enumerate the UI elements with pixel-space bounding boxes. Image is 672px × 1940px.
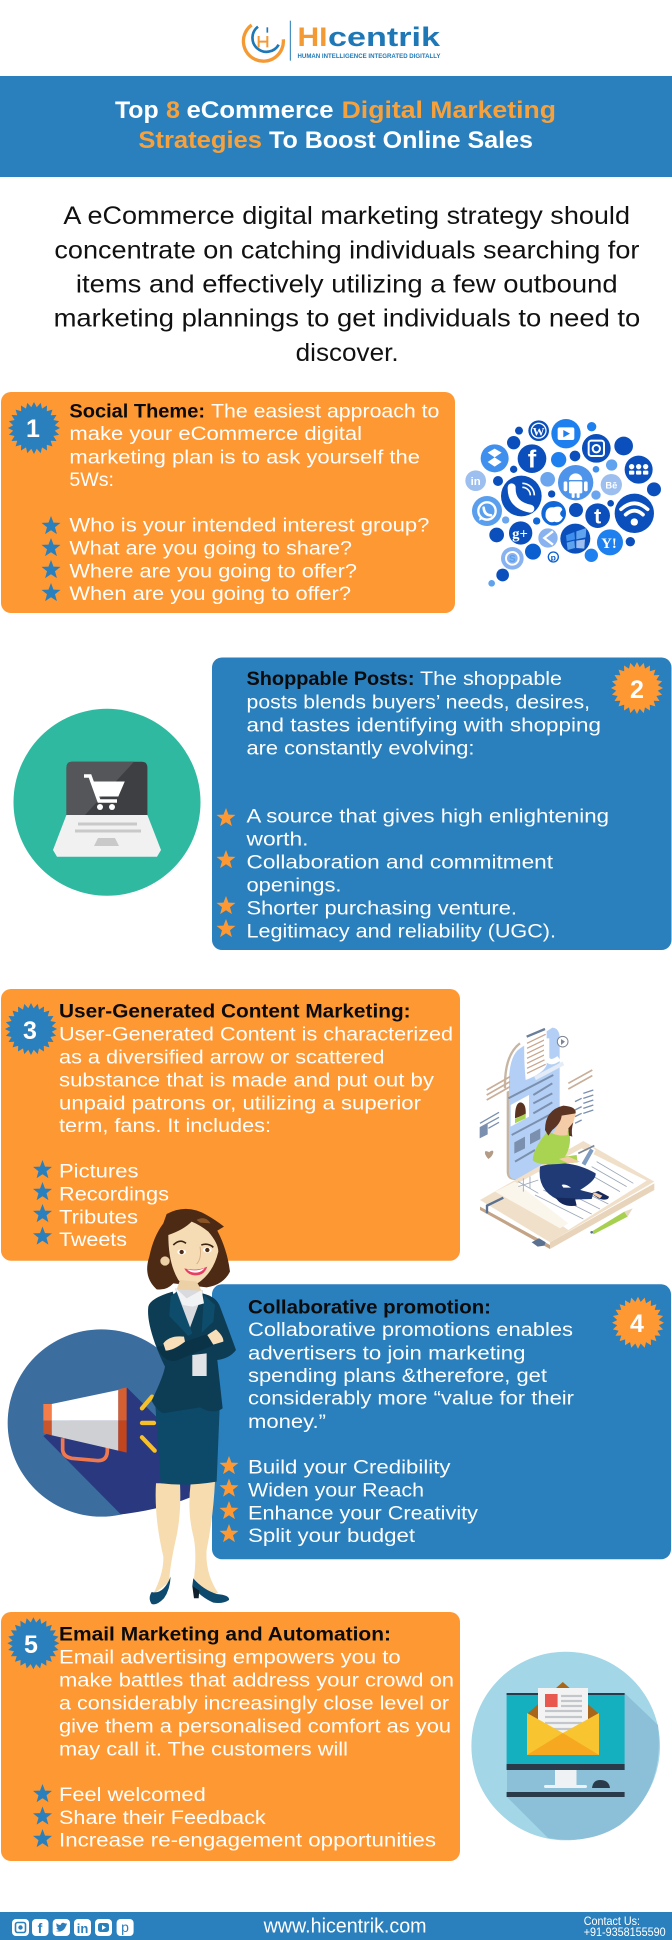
heading and intro text 5 [59,1625,454,1760]
badge 4: 4 [630,1310,644,1338]
icon: email envelope on monitor [471,1652,660,1840]
icon: social media speech cloud: g+ [512,527,528,543]
intro paragraph: marketing plannings to get individuals to need to [54,305,640,333]
heading and intro text 2: posts blends buyers’ needs, desires, [246,692,590,713]
panel 1: social theme [1,392,455,613]
bullet list 4: Enhance your Creativity [248,1503,479,1524]
bullet list 5: Feel welcomed [59,1785,206,1806]
social icons: in [77,1921,88,1936]
heading and intro text 4 [248,1297,575,1433]
heading and intro text 2 [246,669,601,759]
social icons: p [121,1919,129,1935]
panel 5: email marketing [1,1612,460,1861]
heading and intro text 2: are constantly evolving: [246,738,474,759]
heading and intro text 5: Email advertising empowers you to [59,1648,401,1669]
badge 4 [612,1297,664,1349]
bullet list 2: Legitimacy and reliability (UGC). [246,921,556,942]
badge 1: 1 [26,415,40,443]
title banner: To Boost Online Sales [269,127,533,154]
intro paragraph: concentrate on catching individuals searching for [54,237,639,265]
title banner: Digital Marketing [342,97,556,124]
logo: HIcentrik [243,21,441,61]
icon: social media speech cloud: Y! [601,536,617,552]
heading and intro text 1: 5Ws: [69,470,114,491]
contact details [584,1914,666,1939]
bullet list 2 [216,807,609,942]
heading and intro text 4: Collaborative promotion: [248,1297,491,1318]
title banner [0,76,672,177]
badge 1 [8,402,60,454]
bullet list 4: Split your budget [248,1526,416,1547]
illustration: person reading on a book with giant phone [480,1028,654,1249]
icon: social media speech cloud: in [471,476,481,488]
website url: www.hicentrik.com [263,1916,427,1938]
intro paragraph: items and effectively utilizing a few outbound [76,271,618,299]
heading and intro text 3 [59,1002,453,1137]
icon: social media speech cloud [465,419,661,587]
intro paragraph: discover. [296,339,399,367]
icon: laptop with shopping cart on green circle [14,709,200,896]
bullet list 1: Who is your intended interest group? [69,516,429,537]
bullet list 2: Shorter purchasing venture. [246,898,517,919]
heading and intro text 4: advertisers to join marketing [248,1343,526,1364]
heading and intro text 4: money.” [248,1412,326,1433]
badge 5 [7,1617,59,1669]
social icons: f [38,1920,43,1936]
logo: HIcentrik: HI [298,22,328,52]
icon: social media speech cloud: t [594,504,601,528]
bullet list 5: Increase re-engagement opportunities [59,1831,436,1852]
footer bar [0,1912,672,1940]
title banner: eCommerce [186,97,334,124]
heading and intro text 3: User-Generated Content is characterized [59,1025,453,1046]
bullet list 4: Build your Credibility [248,1457,451,1478]
bullet list 2: Collaboration and commitment [246,852,554,873]
bullet list 2: openings. [246,876,342,897]
icon: social media speech cloud: Bē [605,480,617,490]
social icons [12,1919,134,1936]
icon: social media speech cloud: p [551,553,556,563]
heading and intro text 4: considerably more “value for their [248,1389,575,1410]
heading and intro text 5: Email Marketing and Automation: [59,1625,391,1646]
badge 3: 3 [23,1017,37,1045]
bullet list 3: Recordings [59,1185,169,1206]
bullet list 2: A source that gives high enlightening [246,807,609,828]
bullet list 1 [42,516,429,605]
bullet list 1: Where are you going to offer? [69,561,357,582]
contact details: Contact Us: [584,1914,640,1928]
logo: HIcentrik: centrik [328,22,441,52]
bullet list 4: Widen your Reach [248,1480,424,1501]
heading and intro text 3: User-Generated Content Marketing: [59,1002,411,1023]
bullet list 3: Pictures [59,1162,138,1183]
title banner: Top [115,97,159,124]
intro paragraph [54,202,640,367]
heading and intro text 3: unpaid patrons or, utilizing a superior [59,1093,422,1114]
panel 2: shoppable posts [212,658,672,950]
badge 2: 2 [630,676,644,704]
heading and intro text 3: substance that is made and put out by [59,1071,435,1092]
bullet list 1: What are you going to share? [69,538,352,559]
logo: HIcentrik: HUMAN INTELLIGENCE INTEGRATED DIGITALLY [298,54,440,60]
heading and intro text 3: term, fans. It includes: [59,1116,271,1137]
heading and intro text 4: Collaborative promotions enables [248,1320,573,1341]
heading and intro text 1 [69,401,439,491]
heading and intro text 4: spending plans &therefore, get [248,1366,548,1387]
panel 4: collaborative promotion [212,1284,671,1559]
panel 3: user-generated content [1,989,460,1261]
icon: social media speech cloud: W [533,424,545,438]
bullet list 4 [220,1456,479,1547]
bullet list 3 [33,1160,169,1251]
intro paragraph: A eCommerce digital marketing strategy should [63,202,630,230]
heading and intro text 1: marketing plan is to ask yourself the [69,447,420,468]
illustration: businesswoman with crossed arms [147,1209,236,1604]
heading and intro text 2: The shoppable [420,669,562,690]
badge 3 [5,1003,57,1055]
icon: megaphone on blue circle [8,1329,200,1517]
title banner: Strategies [138,127,262,154]
badge 5: 5 [24,1631,38,1659]
heading and intro text 5: give them a personalised comfort as you [59,1716,451,1737]
heading and intro text 2: and tastes identifying with shopping [246,716,601,737]
bullet list 3: Tweets [59,1230,127,1251]
bullet list 5 [33,1784,436,1852]
bullet list 3: Tributes [59,1207,138,1228]
heading and intro text 5: make battles that address your crowd on [59,1671,454,1692]
bullet list 5: Share their Feedback [59,1808,266,1829]
heading and intro text 1: The easiest approach to [211,401,439,422]
bullet list 2: worth. [245,830,308,851]
icon: social media speech cloud: S [509,554,516,565]
badge 2 [611,662,663,714]
title banner: 8 [166,97,180,124]
heading and intro text 1: Social Theme: [69,401,205,422]
heading and intro text 1: make your eCommerce digital [69,424,362,445]
heading and intro text 5: a considerably increasingly close level or [59,1694,450,1715]
heading and intro text 2: Shoppable Posts: [246,669,414,690]
bullet list 1: When are you going to offer? [69,584,351,605]
heading and intro text 5: may call it. The customers will [59,1739,348,1760]
icon: social media speech cloud: f [528,445,537,473]
heading and intro text 3: as a diversified arrow or scattered [59,1048,384,1069]
